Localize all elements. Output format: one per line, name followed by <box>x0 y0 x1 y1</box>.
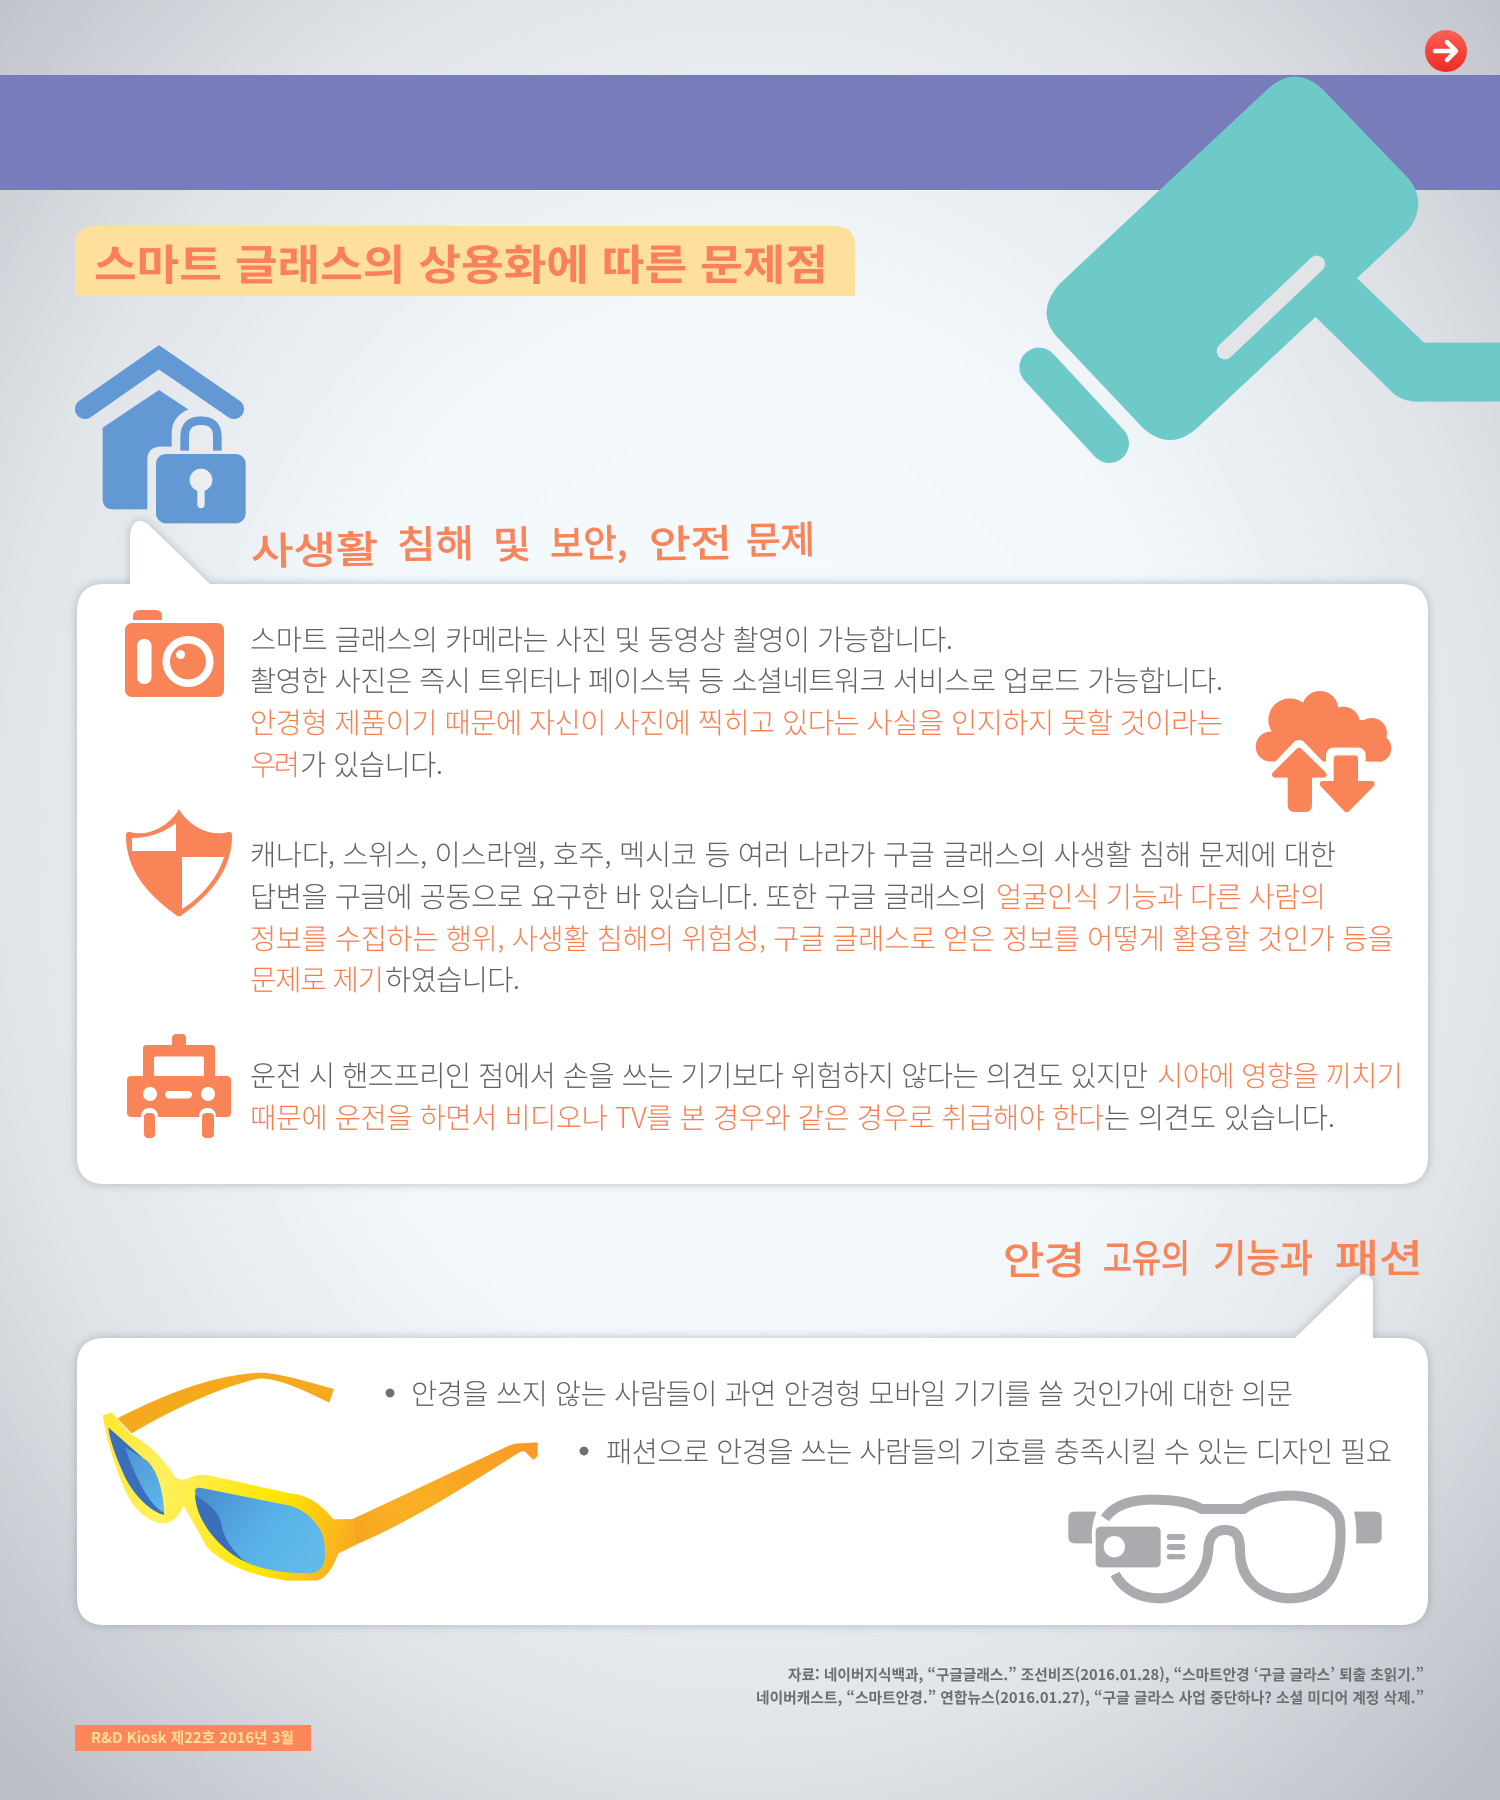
paragraph: international privacy response: 캐나다, 스위스, 이스라엘, 호주, 멕시코 등 여러 나라가 구글 글래스의 사생활 침해 문제에 대한 <box>250 833 1336 874</box>
source notes: 네이버캐스트, “스마트안경.” 연합뉴스(2016.01.27), “구글 글라스 사업 중단하나? 소셜 미디어 계정 삭제.” <box>756 1687 1424 1708</box>
icon: smart glasses <box>1068 1496 1382 1598</box>
paragraph: driving risk <box>250 1054 1403 1137</box>
icon: next arrow button <box>1425 30 1467 72</box>
heading: privacy and safety problems: 및 <box>492 514 531 570</box>
speech bubble panel shape <box>77 521 1428 1184</box>
paragraph: international privacy response: 하였습니다. <box>385 958 520 999</box>
heading: glasses rejection and fashion: 기능과 <box>1213 1228 1313 1283</box>
paragraph: camera upload risk: 가 있습니다. <box>300 743 443 784</box>
heading: privacy and safety problems: 침해 <box>396 513 474 569</box>
title: 스마트 글래스의 상용화에 따른 문제점 <box>94 232 828 293</box>
paragraph: international privacy response: 문제로 제기 <box>250 958 384 999</box>
paragraph: camera upload risk: 스마트 글래스의 카메라는 사진 및 동영상 촬영이 가능합니다. <box>250 618 953 659</box>
heading: glasses rejection and fashion: 고유의 <box>1103 1228 1190 1283</box>
paragraph: driving risk: 시야에 영향을 끼치기 <box>1157 1054 1403 1095</box>
heading: glasses rejection and fashion <box>1003 1228 1423 1285</box>
icon: car <box>127 1034 231 1138</box>
bullet: fashion design need: 패션으로 안경을 쓰는 사람들의 기호를 충족시킬 수 있는 디자인 필요 <box>606 1430 1392 1471</box>
paragraph: international privacy response: 얼굴인식 기능과 다른 사람의 <box>996 875 1326 916</box>
icon: sunglasses <box>103 1373 538 1581</box>
heading: privacy and safety problems: 보안, <box>549 512 627 569</box>
heading: privacy and safety problems: 문제 <box>745 509 815 565</box>
paragraph: international privacy response: 답변을 구글에 공동으로 요구한 바 있습니다. 또한 구글 글래스의 <box>250 875 987 916</box>
icon: cloud with up and down arrows <box>1256 691 1391 818</box>
heading: privacy and safety problems: 안전 <box>648 512 732 569</box>
paragraph: driving risk: 때문에 운전을 하면서 비디오나 TV를 본 경우와 같은 경우로 취급해야 한다 <box>250 1096 1104 1137</box>
icon: house with padlock <box>85 357 246 523</box>
paragraph: camera upload risk: 우려 <box>250 743 300 784</box>
paragraph: driving risk: 는 의견도 있습니다. <box>1104 1096 1335 1137</box>
icon: shield <box>126 809 232 916</box>
bullet: doubts about non-wearers: 안경을 쓰지 않는 사람들이 과연 안경형 모바일 기기를 쓸 것인가에 대한 의문 <box>411 1372 1293 1413</box>
source notes: 자료: 네이버지식백과, “구글글래스.” 조선비즈(2016.01.28), “스마트안경 ‘구글 글라스’ 퇴출 초읽기.” <box>788 1664 1424 1685</box>
paragraph: international privacy response <box>250 833 1394 999</box>
panel: glasses and fashion <box>77 1275 1428 1625</box>
panel: privacy and safety <box>77 521 1428 1184</box>
speech bubble panel shape <box>77 1275 1428 1625</box>
purple header band <box>0 75 1500 190</box>
heading: privacy and safety problems: 사생활 <box>251 519 378 576</box>
icon: camera <box>125 610 224 697</box>
heading: glasses rejection and fashion: 패션 <box>1335 1228 1423 1283</box>
issue badge: R&D Kiosk 제22호 2016년 3월 <box>91 1727 294 1748</box>
paragraph: camera upload risk: 안경형 제품이기 때문에 자신이 사진에 찍히고 있다는 사실을 인지하지 못할 것이라는 <box>250 701 1223 742</box>
paragraph: camera upload risk <box>250 618 1223 784</box>
paragraph: international privacy response: 정보를 수집하는 행위, 사생활 침해의 위험성, 구글 글래스로 얻은 정보를 어떻게 활용할 것인가 등을 <box>250 917 1394 958</box>
heading: privacy and safety problems <box>250 507 815 576</box>
heading: glasses rejection and fashion: 안경 <box>1003 1230 1085 1285</box>
paragraph: driving risk: 운전 시 핸즈프리인 점에서 손을 쓰는 기기보다 위험하지 않다는 의견도 있지만 <box>250 1054 1148 1095</box>
paragraph: camera upload risk: 촬영한 사진은 즉시 트위터나 페이스북 등 소셜네트워크 서비스로 업로드 가능합니다. <box>250 659 1223 700</box>
source notes <box>756 1664 1424 1708</box>
icon: surveillance camera <box>1039 77 1500 443</box>
